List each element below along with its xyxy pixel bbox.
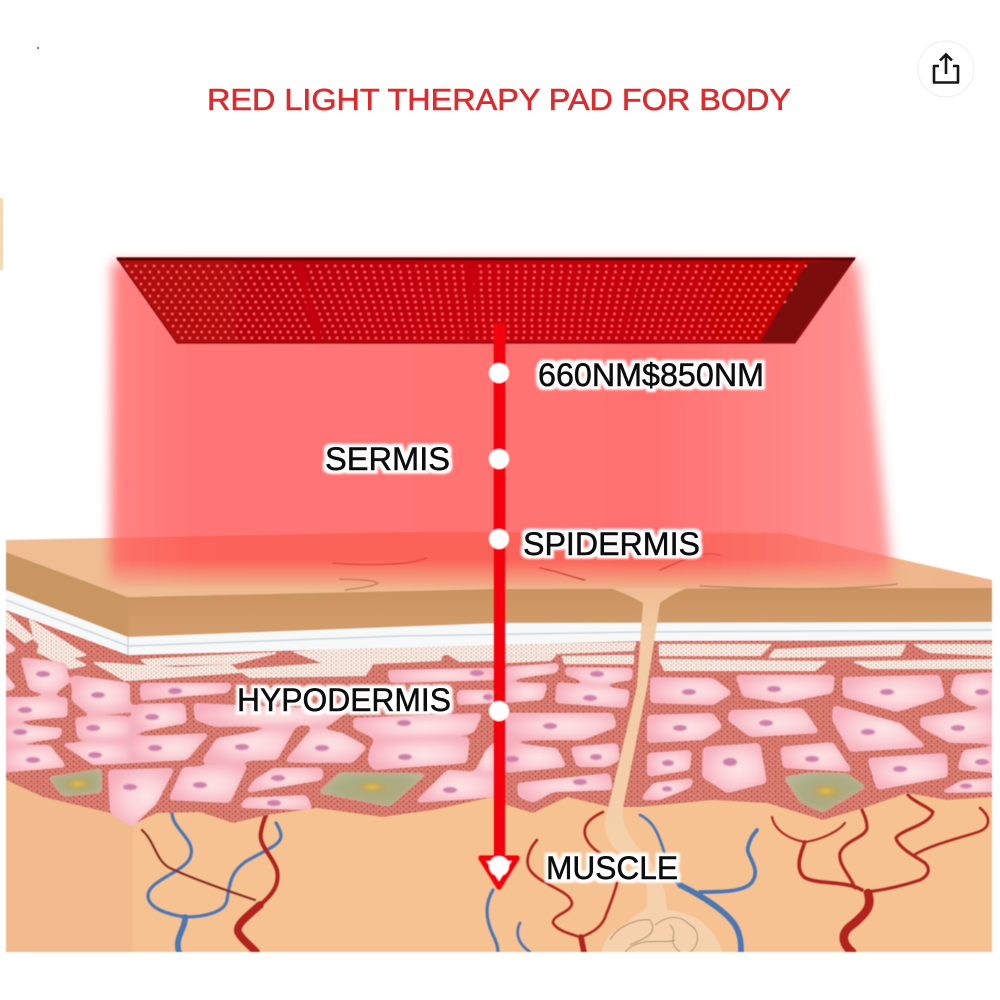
fat cells <box>47 768 867 813</box>
label: hypodermis: HYPODERMIS <box>237 682 451 718</box>
hair follicle and gland <box>602 588 722 952</box>
red light beam <box>110 262 895 600</box>
dermis base layer <box>6 600 992 825</box>
deep tissue layer <box>6 770 993 952</box>
title: RED LIGHT THERAPY PAD FOR BODY <box>207 82 791 117</box>
skin creases <box>333 554 897 590</box>
skin brown side faces <box>6 552 992 637</box>
label: sermis: SERMIS <box>325 441 450 477</box>
small speck <box>37 47 39 49</box>
illustration <box>0 258 996 952</box>
LED therapy pad <box>117 258 855 343</box>
icon: share button <box>918 41 974 97</box>
blood vessels: blue veins <box>148 810 757 952</box>
label: spidermis: SPIDERMIS <box>523 526 700 562</box>
LED dots <box>127 266 806 338</box>
granular layer <box>6 612 992 680</box>
depth markers <box>489 363 509 876</box>
label: muscle: MUSCLE <box>546 850 678 886</box>
epidermis white layer <box>6 590 992 655</box>
left edge sliver <box>0 198 3 270</box>
label: wavelength: 660NM$850NM <box>538 357 764 393</box>
cell nuclei <box>13 670 989 806</box>
pink dermal cells <box>0 635 996 827</box>
skin top surface <box>6 532 992 597</box>
panel separators <box>298 262 640 342</box>
skin cross-section <box>0 532 996 952</box>
penetration arrow <box>481 323 517 887</box>
blood vessels: red arteries <box>142 795 988 952</box>
